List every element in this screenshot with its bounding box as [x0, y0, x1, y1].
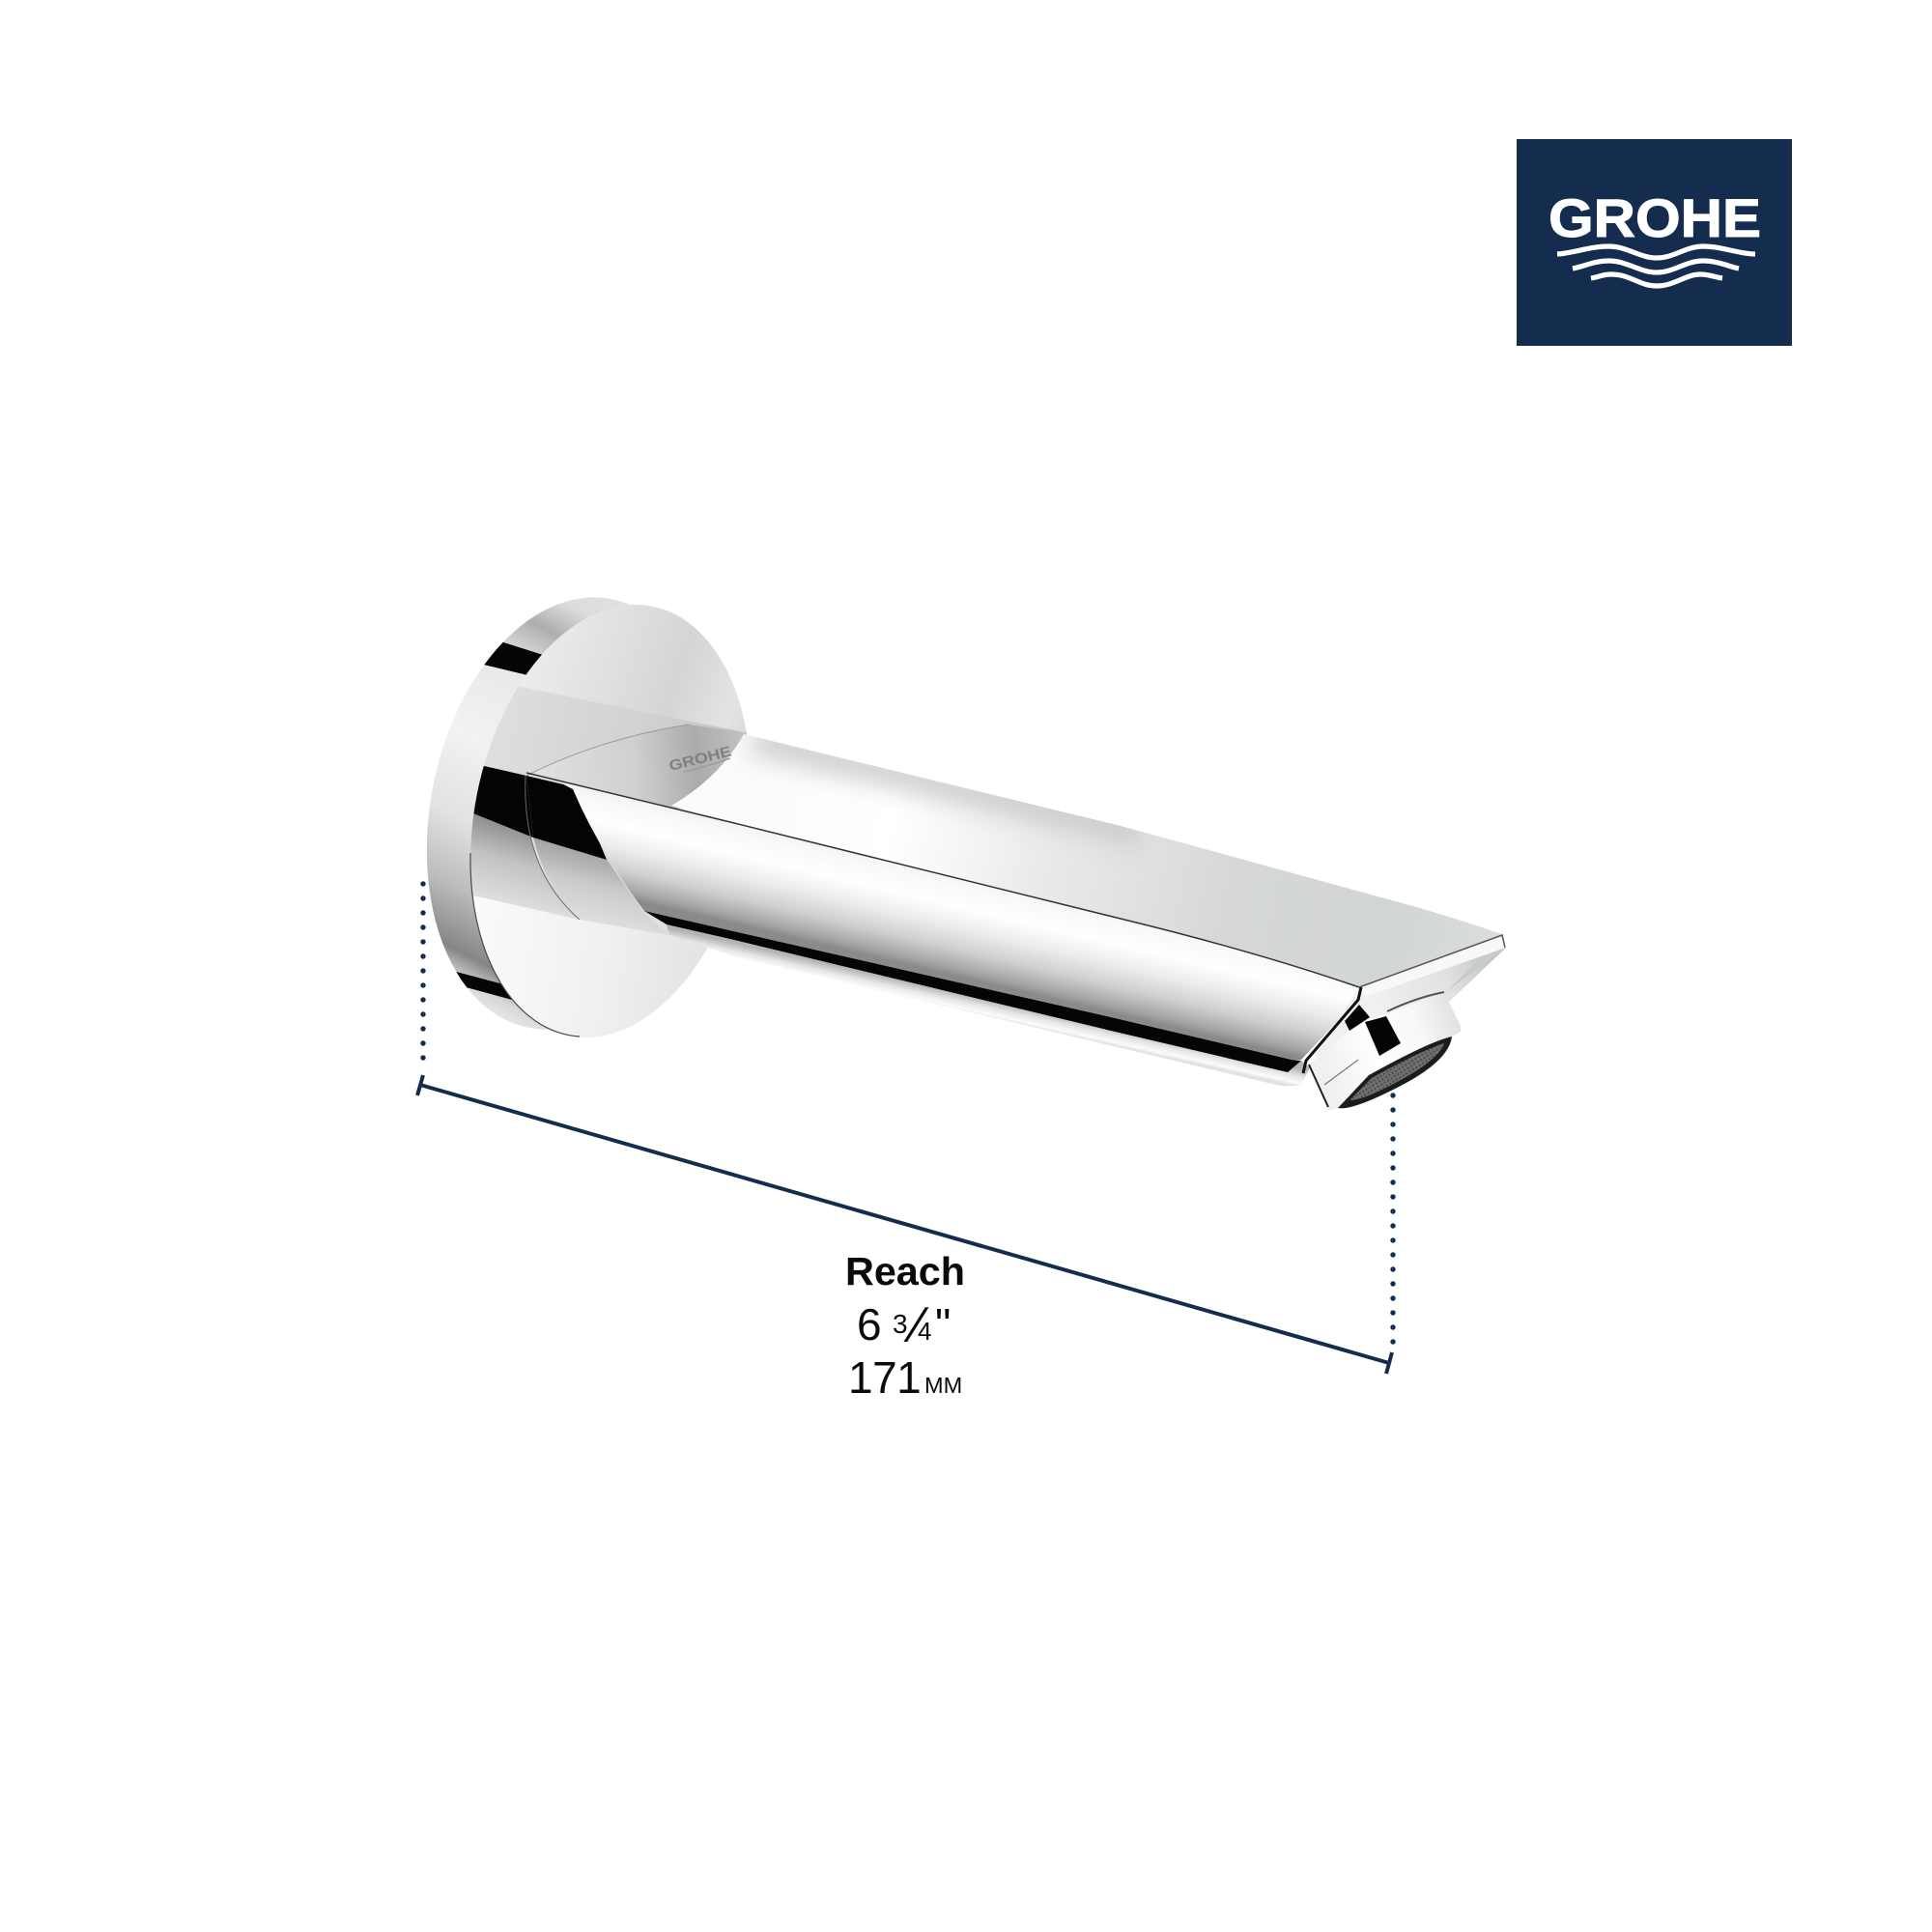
spout mouth and underside: [1303, 935, 1506, 1073]
imperial measurement: 6: [857, 1299, 882, 1350]
aerator mesh: [1338, 1037, 1452, 1108]
reach label: [845, 1249, 965, 1403]
spout upper face: [526, 734, 1504, 987]
infographic canvas: [415, 139, 1792, 1393]
dotted extension line left: [420, 881, 426, 1061]
heading: Reach: Reach: [845, 1249, 965, 1293]
tub spout product image: [391, 573, 1506, 1111]
imperial measurement: 4: [918, 1317, 931, 1346]
metric measurement: MM: [924, 1373, 962, 1398]
imperial measurement: ⁄: [903, 1297, 929, 1353]
metric measurement: 171: [848, 1352, 921, 1403]
reach dimension line: [417, 1075, 1392, 1374]
GROHE logo: GROHE: [1548, 187, 1761, 248]
spout lower body: [563, 782, 1359, 1086]
dotted extension line right: [1390, 1093, 1396, 1345]
wall plate rear rim: [427, 597, 630, 1030]
imperial measurement: [857, 1297, 951, 1353]
wall plate front face: [469, 605, 748, 1037]
imperial measurement: ": [935, 1299, 951, 1350]
GROHE logo: [1517, 139, 1792, 346]
metric measurement: [848, 1352, 962, 1403]
aerator: [1309, 992, 1461, 1111]
spout neck collar: [526, 776, 668, 935]
imperial measurement: 3: [893, 1309, 908, 1339]
small engraved GROHE mark: GROHE: [668, 743, 733, 775]
